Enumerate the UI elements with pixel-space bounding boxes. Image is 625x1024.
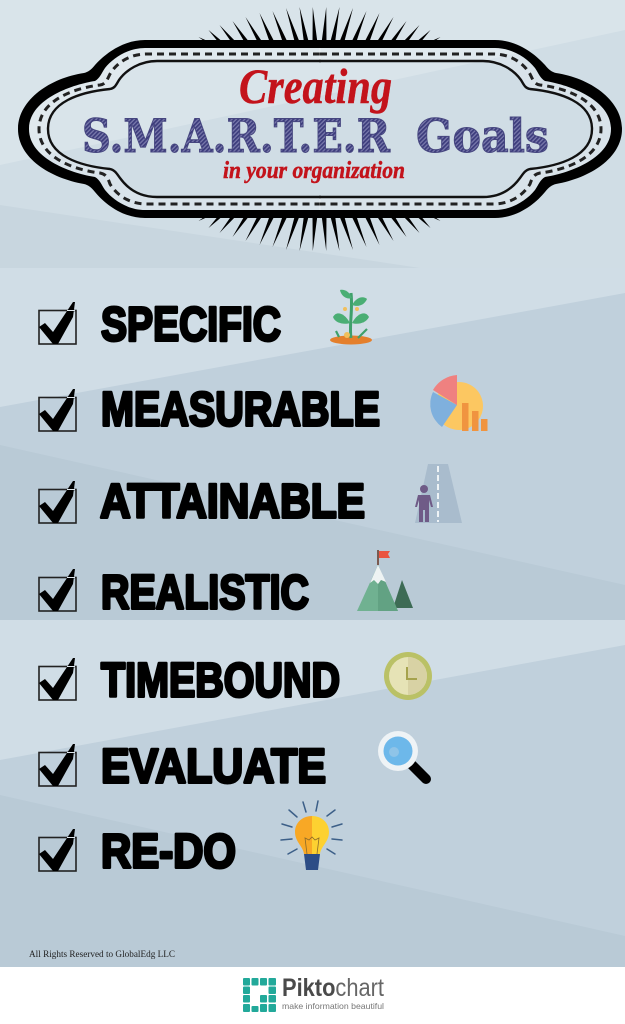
logo wordmark: Piktochart	[282, 974, 384, 1002]
item: attainable	[39, 464, 462, 528]
icon: mountain with flag	[357, 550, 413, 611]
background: middle section	[0, 268, 625, 620]
badge frame	[18, 40, 622, 218]
logo mark	[243, 978, 276, 1012]
label: ATTAINABLE	[100, 476, 365, 528]
icon: clock	[384, 652, 432, 700]
sunburst rays	[198, 7, 440, 251]
background: header section	[0, 0, 625, 268]
copyright text: All Rights Reserved to GlobalEdg LLC	[29, 949, 175, 960]
checkbox	[39, 569, 76, 611]
title: S.M.A.R.T.E.R: S.M.A.R.T.E.R	[82, 109, 391, 163]
checkbox	[39, 744, 76, 786]
background: lower section	[0, 620, 625, 967]
icon: plant	[330, 290, 372, 344]
checkbox	[39, 658, 76, 700]
label: TIMEBOUND	[101, 654, 340, 708]
item: specific	[39, 290, 372, 352]
title: Goals: Goals	[416, 109, 549, 163]
checkbox	[39, 389, 76, 431]
item: evaluate	[39, 731, 426, 794]
checkbox	[39, 829, 76, 871]
item: realistic	[39, 550, 413, 620]
piktochart logo	[243, 974, 384, 1012]
label: SPECIFIC	[101, 298, 281, 352]
label: REALISTIC	[101, 566, 309, 620]
logo tagline: make information beautiful	[282, 1001, 384, 1011]
label: MEASURABLE	[101, 384, 380, 436]
label: RE-DO	[101, 826, 236, 878]
icon: light bulb	[281, 801, 342, 870]
checkbox	[39, 302, 76, 344]
footer white band	[0, 967, 625, 1024]
title badge	[18, 7, 622, 251]
item: timebound	[39, 652, 432, 708]
title: Creating: Creating	[239, 58, 392, 114]
icon: pie chart	[430, 375, 488, 431]
item: re-do	[39, 801, 342, 878]
subtitle: in your organization	[223, 158, 405, 184]
label: EVALUATE	[101, 740, 326, 794]
icon: magnifier	[378, 731, 426, 779]
icon: road and person	[415, 464, 462, 523]
checkbox	[39, 481, 76, 523]
item: measurable	[39, 375, 488, 436]
